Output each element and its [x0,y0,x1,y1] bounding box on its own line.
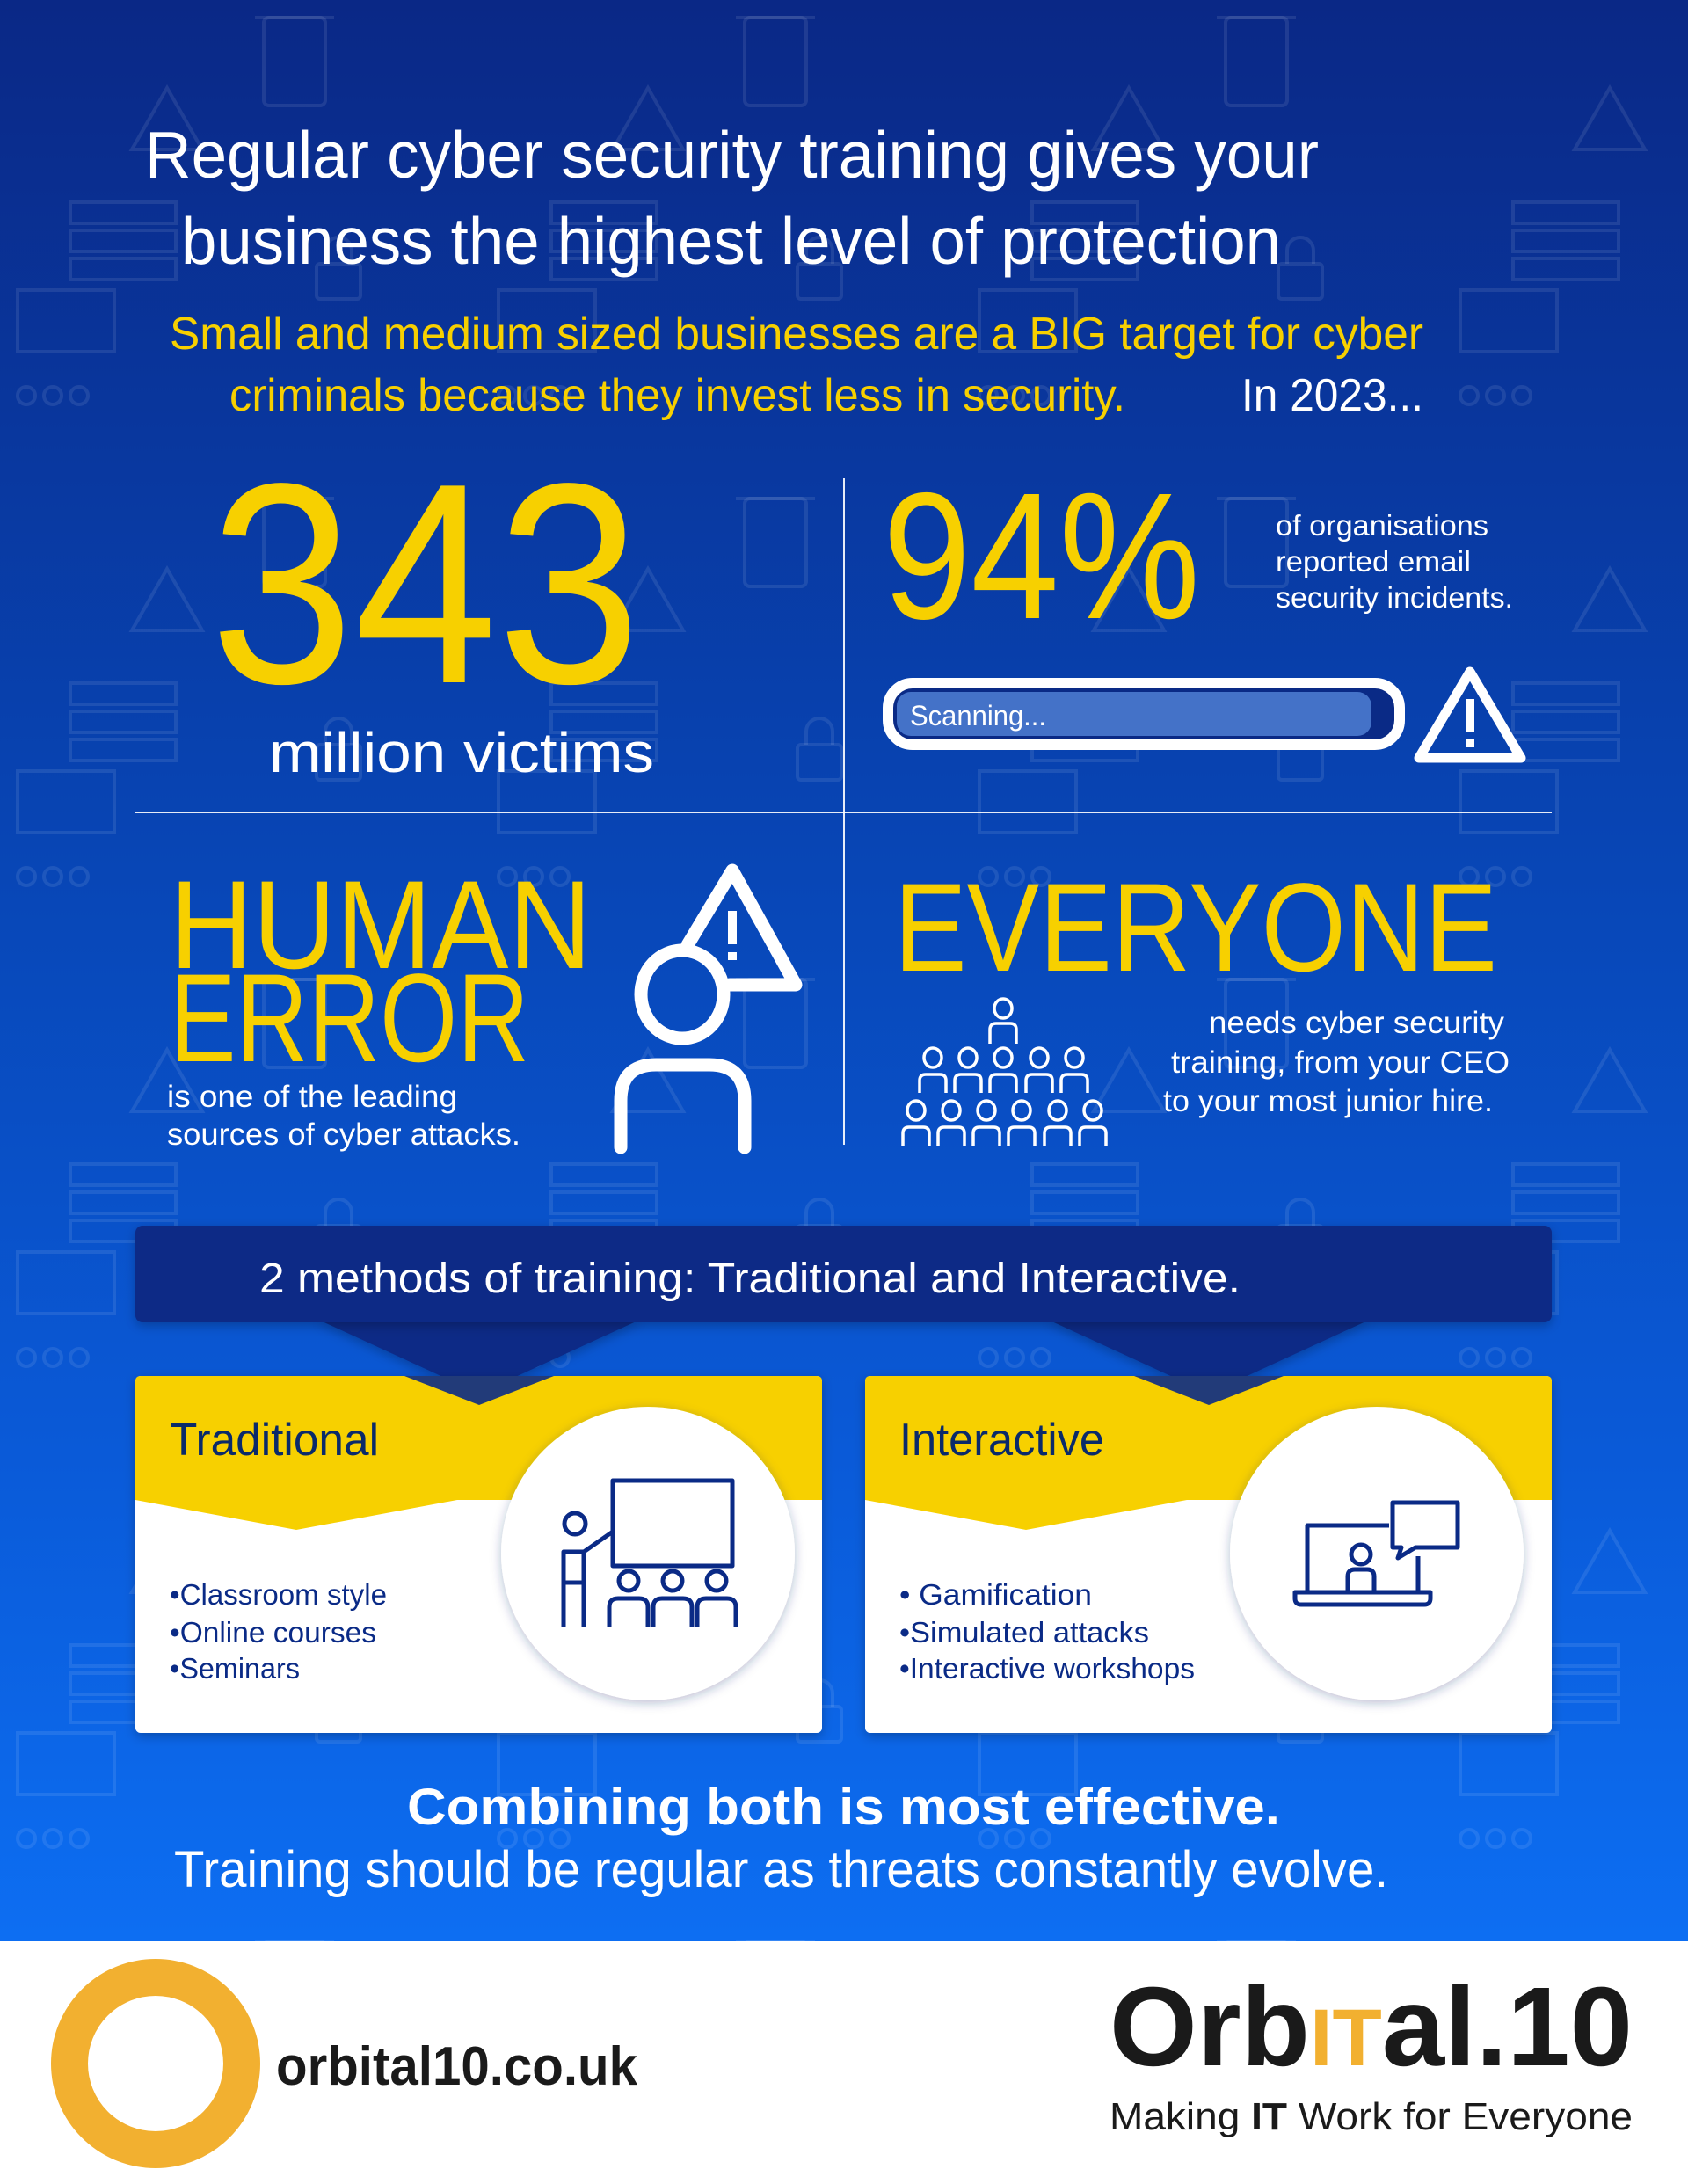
stat: 343 million victims: million victims [269,721,654,784]
human error heading: HUMAN [170,855,592,995]
stat: 94% [883,455,1513,657]
panel: interactive: • Gamification [899,1578,1092,1611]
conclusion text: Training should be regular as threats constantly evolve. [174,1841,1388,1898]
title: Regular cyber security training gives your [145,118,1319,192]
panel: traditional [135,1376,822,1733]
subtitle [170,309,1423,421]
title: business the highest level of protection [181,204,1281,278]
panel: traditional: Traditional [170,1415,379,1466]
footer: brand: Making IT Work for Everyone [1110,2095,1633,2138]
footer: logo ring and url [69,1977,637,2150]
banner: 2 methods: 2 methods of training: Traditional and Interactive. [259,1256,1241,1302]
panel: traditional: •Classroom style [170,1578,387,1611]
panel: interactive: •Interactive workshops [899,1652,1195,1685]
stat: 94%: 94% [883,455,1200,657]
everyone heading: EVERYONE [894,858,1497,998]
everyone text: needs cyber security [1209,1006,1505,1040]
footer: brand: OrbITal.10 [1110,1964,1633,2090]
human error text [167,1080,520,1152]
subtitle: Small and medium sized businesses are a BIG target for cyber [170,309,1423,360]
icon: warning triangle [1419,672,1521,758]
everyone text: to your most junior hire. [1163,1084,1493,1118]
conclusion text [174,1779,1388,1898]
human error heading [170,855,592,1088]
icon: classroom [564,1481,736,1627]
subtitle: criminals because they invest less in security. [229,370,1125,421]
scanning bar [888,683,1400,745]
title [145,118,1319,278]
stat: 94%: of organisations [1276,509,1488,542]
icon: laptop with chat [1295,1503,1458,1605]
icon: group of people [903,999,1106,1146]
footer: logo ring and url: orbital10.co.uk [276,2036,637,2097]
stat: 94%: reported email [1276,545,1471,578]
stat: 94%: security incidents. [1276,581,1513,614]
everyone text [1163,1006,1510,1118]
banner: 2 methods [135,1226,1552,1394]
panel: traditional: •Online courses [170,1616,376,1649]
subtitle: In 2023... [1241,370,1423,421]
panel: interactive [865,1376,1552,1733]
scanning bar: Scanning... [910,700,1046,732]
icon: person with warning [621,870,796,1147]
conclusion text: Combining both is most effective. [407,1779,1280,1836]
human error heading: ERROR [170,949,529,1088]
everyone text: training, from your CEO [1171,1045,1510,1080]
human error text: sources of cyber attacks. [167,1117,520,1152]
panel: interactive: •Simulated attacks [899,1616,1149,1649]
human error text: is one of the leading [167,1080,457,1114]
panel: traditional: •Seminars [170,1652,300,1685]
panel: interactive: Interactive [899,1415,1104,1466]
stat: 343 million victims: 343 [210,424,641,743]
